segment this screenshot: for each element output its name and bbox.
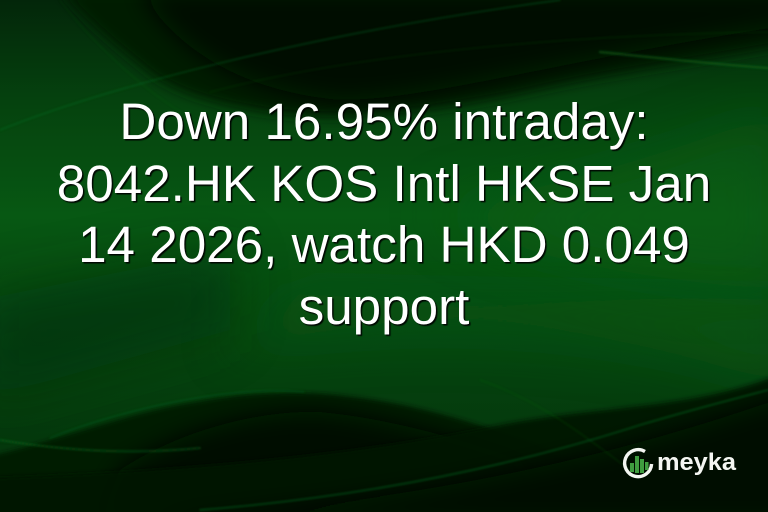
title <box>57 93 711 336</box>
icon: ring with green bars <box>625 450 652 477</box>
bottom dark wave <box>0 393 650 512</box>
soft band lower middle <box>220 290 768 390</box>
title: 14 2026, watch HKD 0.049 <box>78 216 690 273</box>
top dark wave <box>60 0 768 117</box>
soft brighter band on the right <box>430 110 768 290</box>
lower right dark sweep <box>0 370 768 512</box>
wordmark: meyka <box>657 449 737 476</box>
title: Down 16.95% intraday: <box>119 93 649 150</box>
title: 8042.HK KOS Intl HKSE Jan <box>57 155 711 212</box>
soft darker band lower left <box>0 250 230 400</box>
logo: meyka <box>622 448 737 478</box>
title: support <box>299 278 469 335</box>
